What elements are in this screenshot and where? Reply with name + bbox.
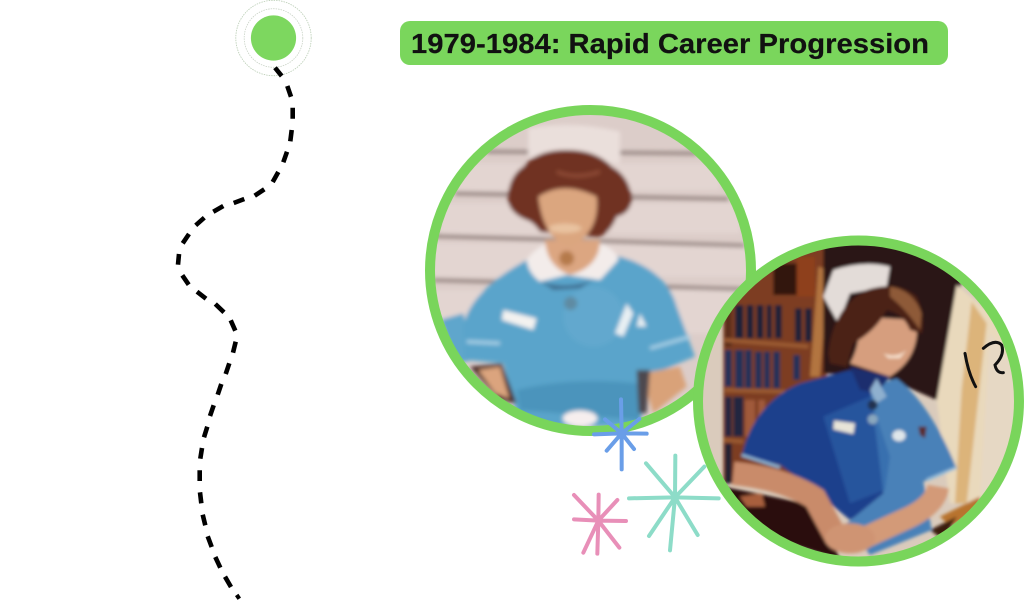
- timeline start marker: [236, 0, 311, 76]
- title text: 1979-1984: Rapid Career Progression: [411, 28, 929, 59]
- sparkle: blue: [594, 399, 647, 469]
- sparkle: pink: [574, 495, 626, 554]
- photo 1 green ring: [430, 110, 751, 431]
- handwritten number 12: [965, 342, 1003, 387]
- decorative sparkles: [574, 399, 719, 554]
- photo 2 green ring: [698, 240, 1019, 562]
- title banner: [400, 21, 948, 65]
- photo: nurse in darker blue uniform: [690, 230, 1024, 570]
- sparkle: teal: [629, 456, 719, 550]
- dashed timeline path: [178, 68, 293, 598]
- photo: nurse in light blue uniform: [420, 100, 760, 440]
